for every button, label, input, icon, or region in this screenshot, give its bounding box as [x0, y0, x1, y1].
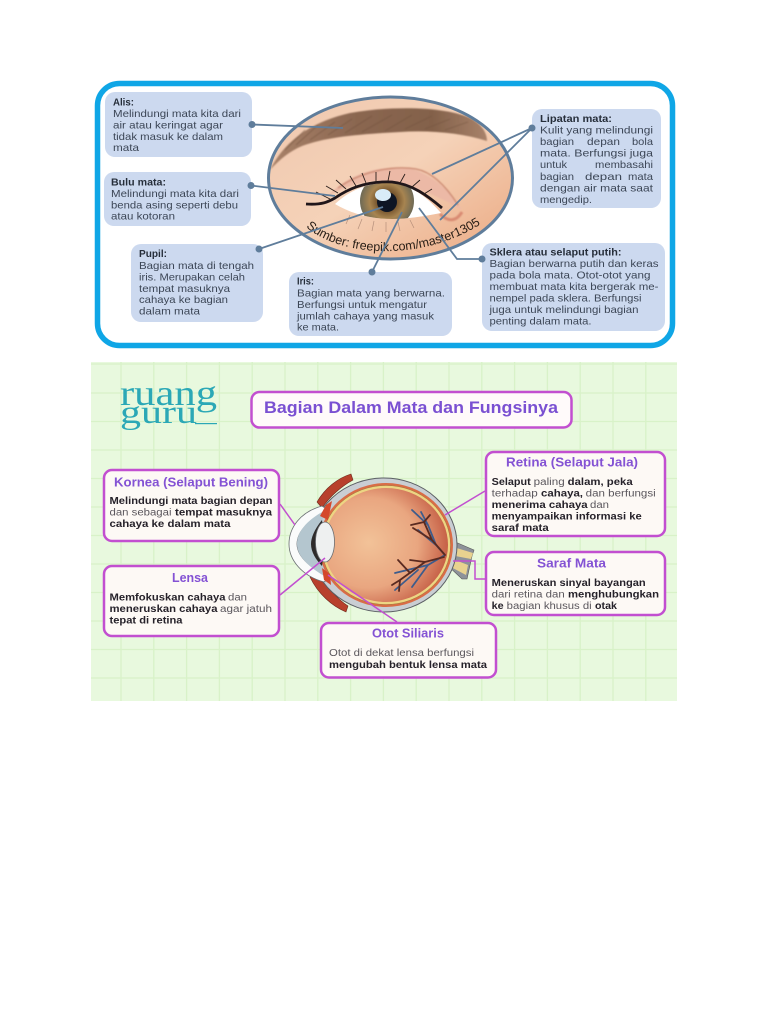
eye outline — [268, 97, 512, 259]
callout: pupil: Pupil: — [139, 248, 167, 260]
callout: lipatan mata: Lipatan mata: — [540, 113, 612, 125]
callout: lipatan mata: bagian — [540, 136, 574, 148]
callout: alis — [105, 92, 256, 157]
callout: sklera — [478, 243, 665, 331]
callout: lensa: Lensa — [172, 571, 209, 585]
callout: pupil: tempat masuknya — [139, 283, 230, 295]
callout: retina: menyampaikan informasi ke — [492, 512, 642, 522]
callout: iris: Berfungsi untuk mengatur — [297, 299, 428, 311]
callout: lensa: dan — [228, 592, 247, 604]
sclera and retina layers — [311, 478, 457, 612]
callout: retina: dan — [590, 500, 609, 511]
callout: retina: Retina (Selaput Jala) — [506, 456, 638, 470]
callout: saraf mata: dari retina dan — [492, 590, 565, 600]
callout: saraf mata: Meneruskan sinyal bayangan — [492, 578, 646, 589]
photo credit: Sumber: freepik.com/master1305 — [307, 218, 480, 254]
optic nerve — [446, 538, 474, 579]
callout: lipatan mata: mata. Berfungsi juga — [540, 148, 653, 160]
logo: ruangguru: guru — [120, 395, 197, 431]
callout: lensa: agar jatuh — [220, 604, 272, 615]
callout: alis: Alis: — [113, 96, 134, 108]
callout: saraf mata: bagian khusus di — [507, 601, 592, 612]
callout: bulu mata: Bulu mata: — [111, 176, 166, 188]
callout: lipatan mata: bola — [632, 136, 653, 148]
callout: saraf mata: ke — [492, 601, 504, 612]
callout: sklera: penting dalam mata. — [490, 316, 592, 328]
title: Bagian Dalam Mata dan Fungsinya — [264, 399, 559, 417]
callout: lensa: tepat di retina — [110, 616, 183, 626]
callout: lensa — [104, 566, 279, 636]
blood vessels — [392, 510, 445, 591]
callout: alis: air atau keringat agar — [113, 120, 224, 132]
callout: saraf mata: otak — [595, 601, 617, 612]
callout: alis: tidak masuk ke dalam — [113, 131, 223, 143]
cornea — [289, 506, 330, 582]
title — [252, 392, 572, 428]
callout: lensa: meneruskan cahaya — [110, 604, 218, 615]
eye photo — [267, 96, 514, 260]
leader lines — [251, 124, 532, 272]
callout: otot siliaris — [321, 623, 496, 678]
callout: bulu mata — [104, 172, 254, 226]
callout: iris — [289, 268, 452, 336]
callout: saraf mata — [486, 552, 665, 615]
callout: bulu mata: Melindungi mata kita dari — [111, 188, 239, 200]
callout: iris: ke mata. — [297, 322, 339, 334]
callout: sklera: Bagian berwarna putih dan keras — [490, 258, 658, 270]
callout: sklera: nempel pada sklera. Berfungsi — [490, 292, 642, 304]
callout: pupil — [131, 244, 263, 322]
callout: kornea: tempat masuknya — [175, 508, 272, 518]
callout: kornea — [104, 470, 279, 541]
callout: otot siliaris: Otot Siliaris — [372, 626, 444, 640]
callout: lipatan mata — [528, 109, 661, 208]
logo: ruangguru: ruang — [120, 373, 217, 413]
ciliary body — [320, 501, 332, 585]
grid background — [91, 362, 677, 701]
callout: retina: cahaya, — [541, 488, 583, 500]
callout: alis: mata — [113, 142, 139, 154]
eye anatomy diagram — [289, 474, 474, 612]
callout: lipatan mata: mata — [628, 171, 653, 183]
callout: lensa: Memfokuskan cahaya — [110, 592, 226, 604]
callout: pupil: iris. Merupakan celah — [139, 272, 245, 284]
callout: retina: saraf mata — [492, 523, 549, 534]
callout: saraf mata: Saraf Mata — [537, 556, 607, 570]
callout: iris: jumlah cahaya yang masuk — [296, 310, 435, 322]
callout: retina: dan berfungsi — [586, 488, 656, 500]
callout: retina: menerima cahaya — [492, 500, 588, 511]
callout: lipatan mata: membasahi — [595, 159, 653, 171]
callout: retina: terhadap — [492, 488, 538, 500]
callout: kornea: Melindungi mata bagian depan — [110, 496, 272, 507]
callout: kornea: Kornea (Selaput Bening) — [114, 476, 268, 490]
callout: kornea: cahaya ke dalam mata — [110, 519, 231, 530]
callout: lipatan mata: dengan air mata saat — [540, 182, 653, 194]
callout: otot siliaris: Otot di dekat lensa berfungsi — [329, 648, 474, 659]
callout: iris: Iris: — [297, 276, 314, 288]
callout: retina: dalam, peka — [568, 477, 633, 488]
callout: bulu mata: benda asing seperti debu — [111, 200, 238, 212]
callout: pupil: dalam mata — [139, 306, 200, 318]
callout: pupil: Bagian mata di tengah — [139, 260, 254, 272]
callout: lipatan mata: untuk — [540, 159, 568, 171]
extraocular muscles — [317, 474, 353, 508]
callout: bulu mata: atau kotoran — [111, 210, 175, 222]
callout: iris: Bagian mata yang berwarna. — [297, 288, 445, 300]
callout: lipatan mata: mengedip. — [540, 194, 592, 206]
callout: sklera: Sklera atau selaput putih: — [490, 246, 622, 258]
logo: ruangguru — [120, 373, 217, 431]
panel frame — [98, 84, 672, 346]
callout: otot siliaris: mengubah bentuk lensa mata — [329, 660, 487, 671]
callout: alis: Melindungi mata kita dari — [113, 108, 241, 120]
callout: sklera: pada bola mata. Otot-otot yang — [490, 270, 651, 282]
panel: bagian dalam mata — [91, 362, 677, 701]
callout: lipatan mata: depan — [587, 136, 620, 148]
callout: kornea: dan sebagai — [110, 508, 172, 518]
callout: lipatan mata: depan — [585, 171, 622, 183]
callout: sklera: membuat mata kita bergerak me- — [490, 281, 659, 293]
callout: lipatan mata: Kulit yang melindungi — [540, 124, 653, 136]
panel: bagian luar mata — [94, 80, 676, 348]
callout: retina: paling — [534, 477, 565, 488]
callout: sklera: juga untuk melindungi bagian — [488, 304, 639, 316]
callout: saraf mata: menghubungkan — [568, 590, 659, 600]
callout: lipatan mata: bagian — [540, 171, 574, 183]
callout: retina: Selaput — [492, 477, 531, 488]
iris section — [311, 520, 325, 566]
pointer lines — [280, 491, 485, 622]
lens — [316, 522, 334, 562]
callout: retina — [486, 452, 665, 536]
callout: pupil: cahaya ke bagian — [139, 294, 228, 306]
